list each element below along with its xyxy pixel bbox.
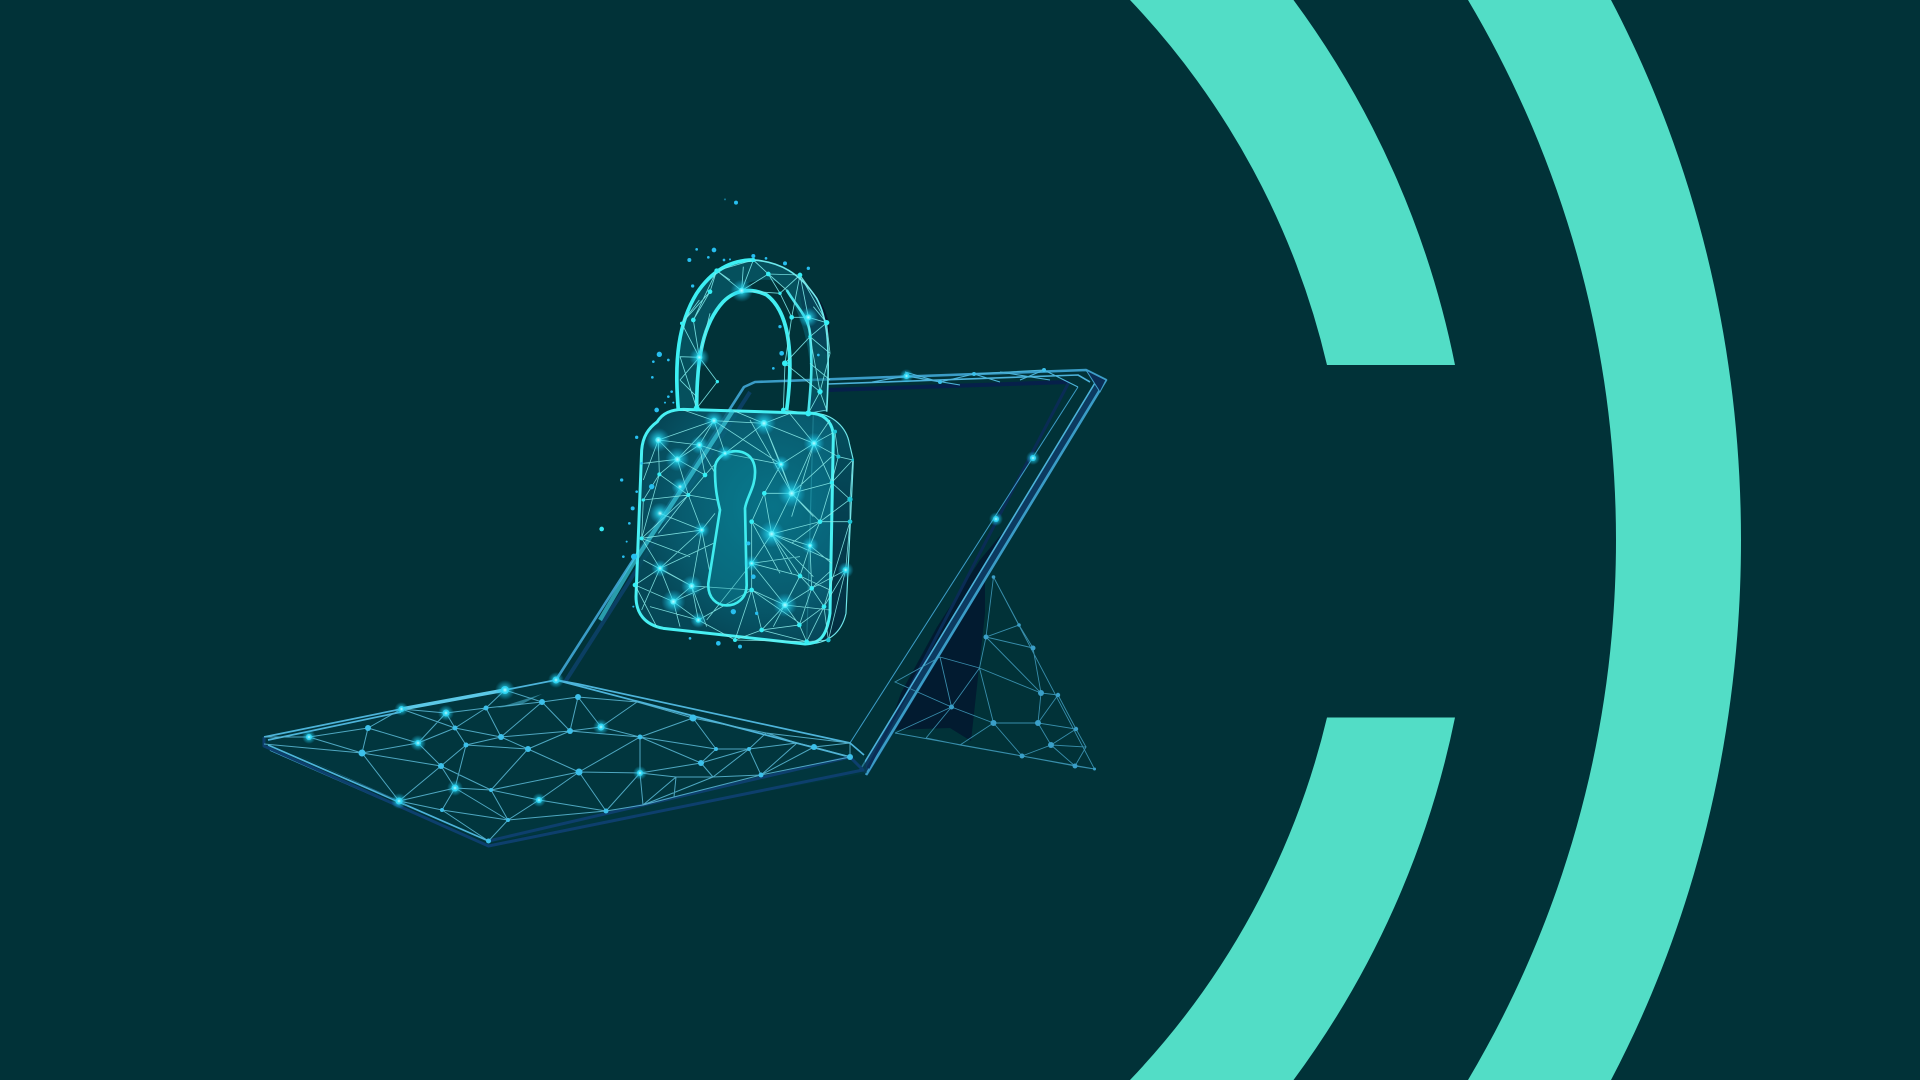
lock node glows: [646, 279, 854, 628]
screen edge seen through lock: [600, 410, 733, 620]
keyhole: [708, 451, 755, 605]
lock body front: [636, 409, 833, 644]
laptop wireframe: [264, 368, 1106, 846]
padlock wireframe: [599, 198, 854, 649]
lock body side: [807, 413, 853, 644]
lock node points: [633, 258, 854, 644]
dark stand shadow: [888, 513, 1019, 741]
laptop node glows: [302, 369, 1040, 809]
body mesh lines: [635, 410, 853, 642]
floating particles: [599, 198, 820, 649]
shackle back shadow: [797, 278, 829, 357]
laptop screen frame: [556, 370, 1106, 775]
inner arc bottom: [1130, 718, 1455, 1080]
shackle band tint: [677, 260, 828, 413]
shackle: [677, 260, 830, 413]
inner arc top: [1130, 0, 1455, 365]
tablet stand mesh: [895, 577, 1094, 769]
laptop node points: [306, 368, 1096, 844]
keyboard base mesh: [264, 680, 867, 846]
outer arc: [1468, 0, 1741, 1080]
